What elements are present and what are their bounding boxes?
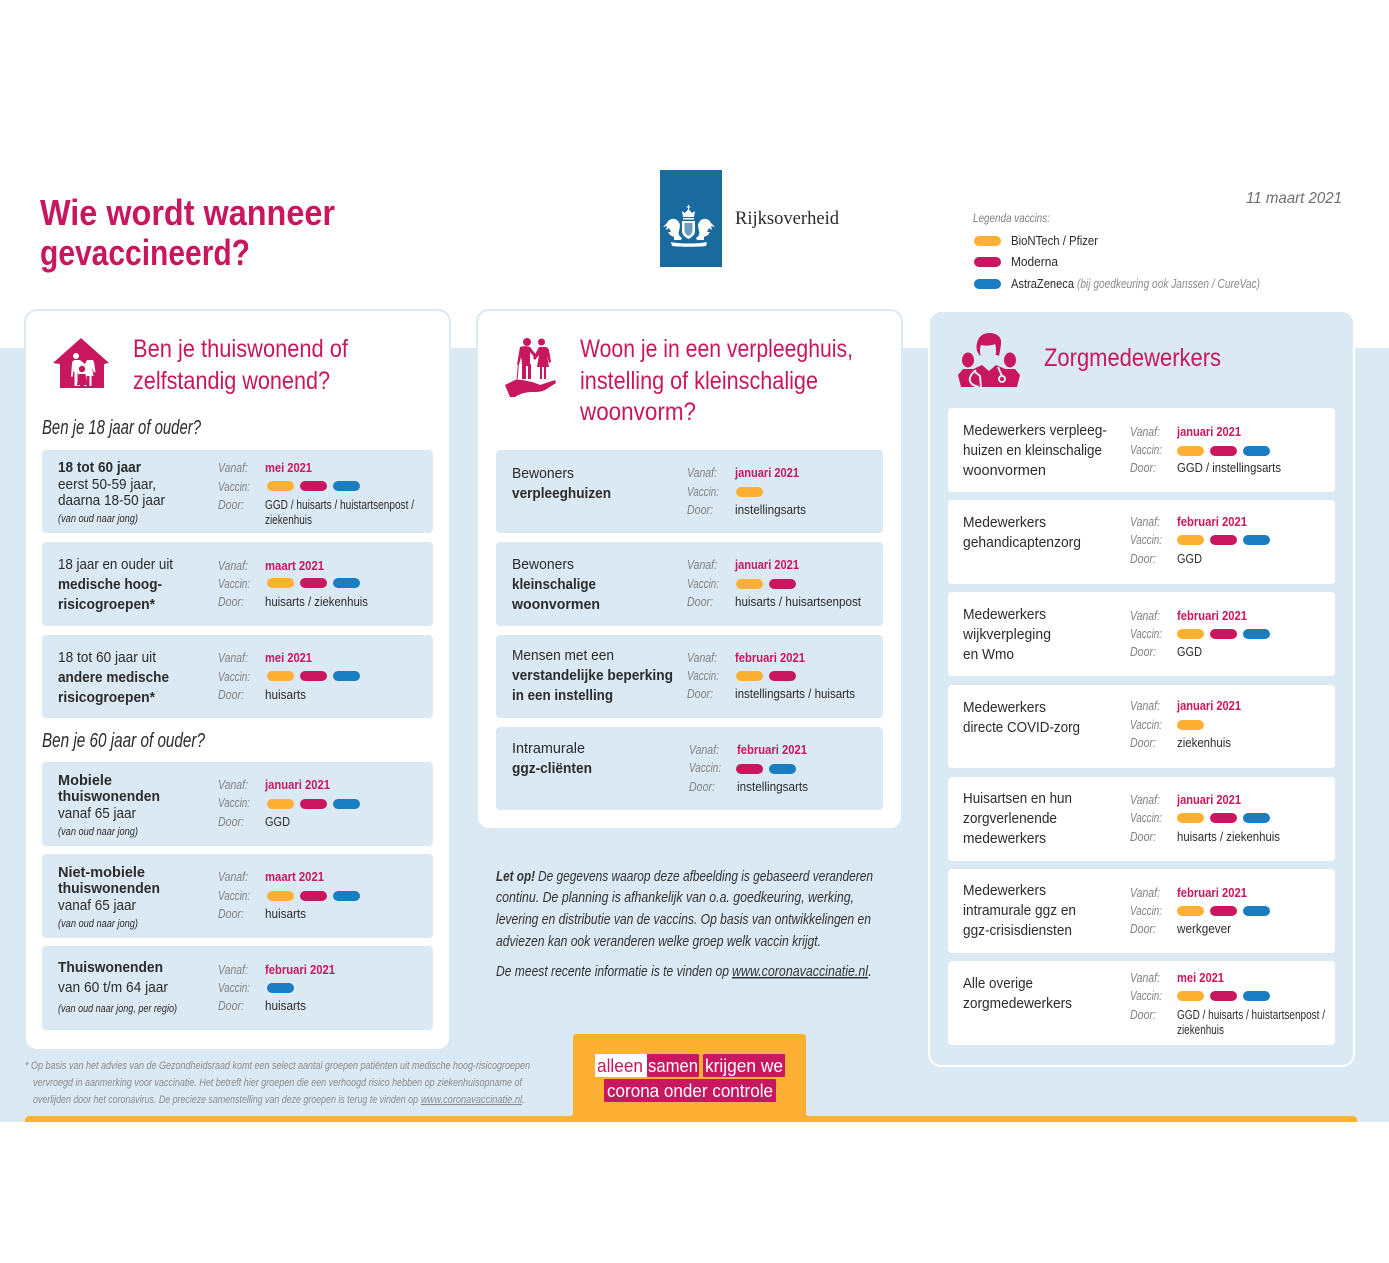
footnote: . bbox=[522, 1094, 525, 1106]
subheading: 18 jaar: Ben je 18 jaar of ouder? bbox=[42, 417, 202, 439]
row: intramurale ggz: Vanaf: bbox=[1130, 885, 1160, 900]
row: thuiswonenden 60 t/m 64: huisarts bbox=[265, 999, 306, 1013]
row: bewoners verpleeghuizen: Bewoners bbox=[512, 465, 574, 482]
row: verpleeghuizen: Door: bbox=[1130, 460, 1156, 475]
row: alle overige: zorgmedewerkers bbox=[963, 995, 1072, 1012]
row: verpleeghuizen: GGD / instellingsarts bbox=[1177, 461, 1281, 475]
row: alle overige: Vaccin: bbox=[1130, 988, 1162, 1003]
row: mobiele thuiswonenden: vanaf 65 jaar bbox=[58, 805, 136, 822]
row: bewoners kleinschalige woonvormen: Vaccin: bbox=[687, 576, 719, 591]
row: andere medische risicogroepen: andere medische bbox=[58, 669, 169, 686]
row: thuiswonenden 60 t/m 64: (van oud naar jong, per regio) bbox=[58, 1003, 177, 1015]
row: wijkverpleging en Wmo bbox=[948, 592, 1335, 676]
footnote: overlijden door het coronavirus. De precieze samenstelling van deze groepen is terug te vinden op bbox=[33, 1094, 418, 1106]
row: bewoners kleinschalige woonvormen: Door: bbox=[687, 594, 713, 609]
row: niet-mobiele thuiswonenden: (van oud naar jong) bbox=[58, 918, 138, 930]
legend: vaccines: (bij goedkeuring ook Janssen / CureVac) bbox=[1077, 277, 1260, 291]
row: mobiele thuiswonenden: januari 2021 bbox=[264, 778, 330, 792]
row: andere medische risicogroepen: Vaccin: bbox=[218, 669, 250, 684]
legend: vaccines: Legenda vaccins: bbox=[973, 211, 1050, 225]
slogan: krijgen we bbox=[705, 1056, 783, 1076]
footnote: www.coronavaccinatie.nl bbox=[421, 1094, 522, 1106]
legend: vaccines: Moderna bbox=[1011, 255, 1058, 269]
row: wijkverpleging en Wmo: Vaccin: bbox=[1130, 626, 1162, 641]
row: directe COVID-zorg bbox=[948, 685, 1335, 768]
row: verstandelijke beperking: in een instelling bbox=[512, 687, 613, 704]
row: huisartsen: Vanaf: bbox=[1130, 792, 1160, 807]
row: intramurale ggz-clienten: instellingsarts bbox=[737, 780, 808, 794]
row: verstandelijke beperking: februari 2021 bbox=[735, 651, 805, 665]
row: andere medische risicogroepen: risicogroepen* bbox=[58, 689, 155, 706]
row: gehandicaptenzorg: Door: bbox=[1130, 551, 1156, 566]
row: huisartsen: medewerkers bbox=[963, 830, 1046, 847]
row: intramurale ggz-clienten: Door: bbox=[689, 779, 715, 794]
row: gehandicaptenzorg: Vaccin: bbox=[1130, 532, 1162, 547]
row: niet-mobiele thuiswonenden bbox=[42, 854, 433, 938]
text block: let op: levering en distributie van de vaccins. Op basis van ontwikkelingen en bbox=[496, 911, 871, 928]
row: alle overige: Vanaf: bbox=[1130, 970, 1160, 985]
title: Wie wordt wanneer bbox=[40, 192, 335, 233]
row: niet-mobiele thuiswonenden: vanaf 65 jaar bbox=[58, 897, 136, 914]
heading: Zorgmedewerkers bbox=[1044, 344, 1221, 372]
row: medische hoog-risicogroepen: maart 2021 bbox=[265, 559, 324, 573]
row: intramurale ggz: intramurale ggz en bbox=[963, 902, 1076, 919]
heading: Ben je thuiswonend of bbox=[133, 335, 348, 363]
heading: instelling of kleinschalige bbox=[580, 367, 818, 395]
row: directe COVID-zorg: ziekenhuis bbox=[1177, 736, 1231, 750]
row: bewoners verpleeghuizen: Vaccin: bbox=[687, 484, 719, 499]
row: mobiele thuiswonenden: Door: bbox=[218, 814, 244, 829]
row: verpleeghuizen: januari 2021 bbox=[1176, 425, 1241, 439]
row: bewoners verpleeghuizen: januari 2021 bbox=[734, 466, 799, 480]
panel: zorgmedewerkers bbox=[929, 311, 1354, 1066]
row: mobiele thuiswonenden: (van oud naar jong) bbox=[58, 826, 138, 838]
heading bbox=[133, 335, 348, 395]
orange footer bar with slogan bbox=[25, 1034, 1357, 1122]
row: andere medische risicogroepen: huisarts bbox=[265, 688, 306, 702]
row: intramurale ggz: ggz-crisisdiensten bbox=[963, 922, 1072, 939]
row: intramurale ggz-clienten: Vaccin: bbox=[689, 760, 721, 775]
row: huisartsen: januari 2021 bbox=[1176, 793, 1241, 807]
text block: let op: De gegevens waarop deze afbeelding is gebaseerd veranderen bbox=[538, 868, 873, 885]
row: intramurale ggz-clienten: ggz-cliënten bbox=[512, 760, 592, 777]
row: medische hoog-risicogroepen: 18 jaar en ouder uit bbox=[58, 556, 174, 573]
row: huisartsen: zorgverlenende bbox=[963, 810, 1057, 827]
row: intramurale ggz-clienten: februari 2021 bbox=[737, 743, 807, 757]
heading: zelfstandig wonend? bbox=[133, 367, 330, 395]
row: wijkverpleging en Wmo: en Wmo bbox=[963, 646, 1014, 663]
row: bewoners kleinschalige woonvormen: huisarts / huisartsenpost bbox=[735, 595, 861, 609]
row: wijkverpleging en Wmo: februari 2021 bbox=[1177, 609, 1247, 623]
row: alle overige: GGD / huisarts / huistartsenpost / bbox=[1177, 1008, 1325, 1022]
row: medische hoog-risicogroepen: risicogroepen* bbox=[58, 596, 155, 613]
row: andere medische risicogroepen: Door: bbox=[218, 687, 244, 702]
row: verpleeghuizen bbox=[948, 408, 1335, 492]
row: alle overige: ziekenhuis bbox=[1177, 1023, 1224, 1037]
row: andere medische risicogroepen: Vanaf: bbox=[218, 650, 248, 665]
row: verpleeghuizen: Medewerkers verpleeg- bbox=[963, 422, 1107, 439]
slogan bbox=[595, 1054, 785, 1102]
row: intramurale ggz: Door: bbox=[1130, 921, 1156, 936]
row: thuiswonenden 60 t/m 64: februari 2021 bbox=[265, 963, 335, 977]
row: thuiswonenden 60 t/m 64: Vanaf: bbox=[218, 962, 248, 977]
row: niet-mobiele thuiswonenden: Vaccin: bbox=[218, 888, 250, 903]
row: verpleeghuizen: huizen en kleinschalige bbox=[963, 442, 1102, 459]
row: medische hoog-risicogroepen: Vaccin: bbox=[218, 576, 250, 591]
legend: vaccines: BioNTech / Pfizer bbox=[1011, 234, 1098, 248]
row: bewoners verpleeghuizen: Vanaf: bbox=[687, 465, 717, 480]
row: verpleeghuizen: Vanaf: bbox=[1130, 424, 1160, 439]
row: mobiele thuiswonenden: Vanaf: bbox=[218, 777, 248, 792]
row: intramurale ggz-clienten: Intramurale bbox=[512, 740, 585, 757]
row: intramurale ggz bbox=[948, 869, 1335, 953]
row: directe COVID-zorg: Door: bbox=[1130, 735, 1156, 750]
slogan: alleen bbox=[597, 1056, 643, 1076]
row: wijkverpleging en Wmo: Medewerkers bbox=[963, 606, 1046, 623]
row: 18 tot 60 jaar: 18 tot 60 jaar bbox=[58, 459, 141, 476]
panel: verpleeghuis bbox=[477, 310, 902, 829]
row: intramurale ggz-clienten: Vanaf: bbox=[689, 742, 719, 757]
row: verpleeghuizen: Vaccin: bbox=[1130, 442, 1162, 457]
text block: let op: adviezen kan ook veranderen welke groep welk vaccin krijgt. bbox=[496, 933, 821, 950]
row: gehandicaptenzorg: Medewerkers bbox=[963, 514, 1046, 531]
row: 18 tot 60 jaar: GGD / huisarts / huistartsenpost / bbox=[265, 498, 414, 512]
heading: woonvorm? bbox=[579, 398, 696, 426]
row: verstandelijke beperking: Vaccin: bbox=[687, 668, 719, 683]
row: huisartsen: Huisartsen en hun bbox=[963, 790, 1072, 807]
row: verstandelijke beperking: verstandelijke beperking bbox=[512, 667, 673, 684]
legend: vaccines: AstraZeneca bbox=[1011, 277, 1074, 291]
icon: care workers bbox=[958, 333, 1020, 387]
row: gehandicaptenzorg: GGD bbox=[1177, 552, 1202, 566]
row: intramurale ggz: Vaccin: bbox=[1130, 903, 1162, 918]
row: alle overige: Alle overige bbox=[963, 975, 1033, 992]
row: wijkverpleging en Wmo: Vanaf: bbox=[1130, 608, 1160, 623]
row: directe COVID-zorg: Medewerkers bbox=[963, 699, 1046, 716]
row: medische hoog-risicogroepen: Vanaf: bbox=[218, 558, 248, 573]
row: directe COVID-zorg: Vaccin: bbox=[1130, 717, 1162, 732]
row: thuiswonenden 60 t/m 64: van 60 t/m 64 jaar bbox=[58, 979, 168, 996]
row: bewoners kleinschalige woonvormen: kleinschalige bbox=[512, 576, 596, 593]
row: intramurale ggz: februari 2021 bbox=[1177, 886, 1247, 900]
row: bewoners kleinschalige woonvormen: Vanaf: bbox=[687, 557, 717, 572]
row: niet-mobiele thuiswonenden: huisarts bbox=[265, 907, 306, 921]
subheading: 60 jaar: Ben je 60 jaar of ouder? bbox=[42, 730, 206, 752]
row: mobiele thuiswonenden: Vaccin: bbox=[218, 795, 250, 810]
row: huisartsen: Door: bbox=[1130, 829, 1156, 844]
row: huisartsen bbox=[948, 777, 1335, 861]
row: bewoners verpleeghuizen: Door: bbox=[687, 502, 713, 517]
row: niet-mobiele thuiswonenden: thuiswonenden bbox=[58, 880, 160, 897]
row: huisartsen: huisarts / ziekenhuis bbox=[1177, 830, 1280, 844]
text block: let op: Let op! bbox=[496, 868, 535, 885]
row: medische hoog-risicogroepen: huisarts / ziekenhuis bbox=[265, 595, 368, 609]
row: 18 tot 60 jaar: ziekenhuis bbox=[265, 513, 312, 527]
row: directe COVID-zorg: Vanaf: bbox=[1130, 698, 1160, 713]
row: mobiele thuiswonenden: Mobiele bbox=[58, 772, 112, 789]
footnote: vervroegd in aanmerking voor vaccinatie. Het betreft hier groepen die een verhoogd risico hebben op ziekenhuisopname of bbox=[33, 1077, 523, 1089]
row: niet-mobiele thuiswonenden: Door: bbox=[218, 906, 244, 921]
row: alle overige: Door: bbox=[1130, 1007, 1156, 1022]
row: bewoners verpleeghuizen bbox=[496, 450, 883, 533]
row: 18 tot 60 jaar: eerst 50-59 jaar, bbox=[58, 476, 156, 493]
wordmark: Rijksoverheid bbox=[735, 208, 839, 229]
row: huisartsen: Vaccin: bbox=[1130, 810, 1162, 825]
title: gevaccineerd? bbox=[40, 232, 250, 273]
text block: let op: De meest recente informatie is te vinden op bbox=[496, 963, 729, 980]
row: mobiele thuiswonenden bbox=[42, 762, 433, 846]
row: wijkverpleging en Wmo: GGD bbox=[1177, 645, 1202, 659]
row: gehandicaptenzorg: gehandicaptenzorg bbox=[963, 534, 1081, 551]
row: verstandelijke beperking: instellingsarts / huisarts bbox=[735, 687, 855, 701]
icon: coat of arms bbox=[663, 205, 715, 247]
row: 18 tot 60 jaar: daarna 18-50 jaar bbox=[58, 492, 165, 509]
row: niet-mobiele thuiswonenden: maart 2021 bbox=[265, 870, 324, 884]
row: verpleeghuizen: woonvormen bbox=[962, 462, 1046, 479]
row: bewoners kleinschalige woonvormen: woonvormen bbox=[511, 596, 600, 613]
row: bewoners kleinschalige woonvormen: Bewoners bbox=[512, 556, 574, 573]
legend: vaccines bbox=[973, 211, 1260, 291]
row: wijkverpleging en Wmo: Door: bbox=[1130, 644, 1156, 659]
row: bewoners kleinschalige woonvormen: januari 2021 bbox=[734, 558, 799, 572]
row: thuiswonenden 60 t/m 64 bbox=[42, 946, 433, 1030]
row: verstandelijke beperking bbox=[496, 635, 883, 718]
row: niet-mobiele thuiswonenden: Niet-mobiele bbox=[58, 864, 145, 881]
row: gehandicaptenzorg: februari 2021 bbox=[1177, 515, 1247, 529]
row: intramurale ggz: Medewerkers bbox=[963, 882, 1046, 899]
row: medische hoog-risicogroepen bbox=[42, 542, 433, 626]
row: mobiele thuiswonenden: thuiswonenden bbox=[58, 788, 160, 805]
row: thuiswonenden 60 t/m 64: Door: bbox=[218, 998, 244, 1013]
heading: Woon je in een verpleeghuis, bbox=[580, 335, 853, 363]
row: niet-mobiele thuiswonenden: Vanaf: bbox=[218, 869, 248, 884]
row: 18 tot 60 jaar bbox=[42, 450, 433, 533]
icon: house with family bbox=[53, 338, 109, 388]
row: 18 tot 60 jaar: Vaccin: bbox=[218, 479, 250, 494]
row: thuiswonenden 60 t/m 64: Thuiswonenden bbox=[58, 959, 163, 976]
row: intramurale ggz-clienten bbox=[496, 727, 883, 810]
text block: let op: continu. De planning is afhankelijk van o.a. goedkeuring, werking, bbox=[496, 889, 854, 906]
text block: let op: . bbox=[868, 963, 872, 980]
logo: Rijksoverheid bbox=[660, 170, 839, 267]
row: verstandelijke beperking: Vanaf: bbox=[687, 650, 717, 665]
text block: let op: www.coronavaccinatie.nl bbox=[732, 963, 869, 980]
row: gehandicaptenzorg bbox=[948, 500, 1335, 584]
row: andere medische risicogroepen: mei 2021 bbox=[265, 651, 312, 665]
row: 18 tot 60 jaar: Door: bbox=[218, 497, 244, 512]
heading bbox=[579, 335, 853, 426]
row: verstandelijke beperking: Door: bbox=[687, 686, 713, 701]
row: directe COVID-zorg: januari 2021 bbox=[1176, 699, 1241, 713]
row: directe COVID-zorg: directe COVID-zorg bbox=[963, 719, 1080, 736]
slogan: corona onder controle bbox=[607, 1081, 773, 1101]
footnote bbox=[25, 1060, 530, 1106]
slogan: samen bbox=[648, 1056, 698, 1076]
row: 18 tot 60 jaar: Vanaf: bbox=[218, 460, 248, 475]
footnote: * Op basis van het advies van de Gezondheidsraad komt een select aantal groepen patiënten uit medische hoog-risicogroepen bbox=[25, 1060, 530, 1072]
row: gehandicaptenzorg: Vanaf: bbox=[1130, 514, 1160, 529]
row: mobiele thuiswonenden: GGD bbox=[265, 815, 290, 829]
row: bewoners kleinschalige woonvormen bbox=[496, 542, 883, 626]
row: medische hoog-risicogroepen: Door: bbox=[218, 594, 244, 609]
row: andere medische risicogroepen bbox=[42, 635, 433, 718]
row: wijkverpleging en Wmo: wijkverpleging bbox=[962, 626, 1051, 643]
row: medische hoog-risicogroepen: medische hoog- bbox=[58, 576, 162, 593]
text block: let op bbox=[496, 868, 873, 980]
row: andere medische risicogroepen: 18 tot 60 jaar uit bbox=[58, 649, 157, 666]
panel: thuiswonend bbox=[25, 310, 450, 1050]
row: verstandelijke beperking: Mensen met een bbox=[512, 647, 614, 664]
title bbox=[40, 192, 335, 273]
row: bewoners verpleeghuizen: instellingsarts bbox=[735, 503, 806, 517]
row: 18 tot 60 jaar: mei 2021 bbox=[265, 461, 312, 475]
row: intramurale ggz: werkgever bbox=[1176, 922, 1231, 936]
row: alle overige: mei 2021 bbox=[1177, 971, 1224, 985]
date: 11 maart 2021 bbox=[1246, 190, 1342, 207]
row: bewoners verpleeghuizen: verpleeghuizen bbox=[512, 485, 611, 502]
row: alle overige bbox=[948, 961, 1335, 1045]
row: 18 tot 60 jaar: (van oud naar jong) bbox=[58, 513, 138, 525]
row: thuiswonenden 60 t/m 64: Vaccin: bbox=[218, 980, 250, 995]
icon: elderly couple on hand bbox=[505, 338, 556, 397]
